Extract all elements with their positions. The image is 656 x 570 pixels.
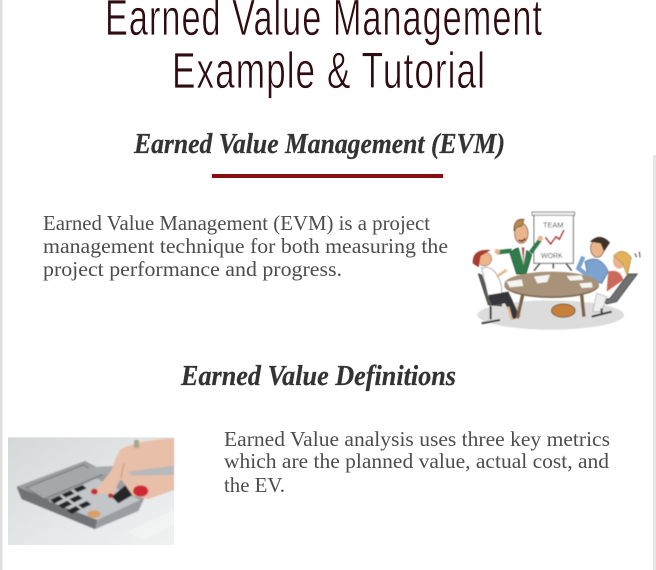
- text block: EVM description: project performance and progress.: [43, 257, 342, 281]
- icon: team meeting illustration: TEAM: [543, 220, 563, 229]
- text block: EVM description: Earned Value Management (EVM) is a project: [43, 211, 430, 235]
- text block: EVM description: [43, 211, 448, 281]
- icon: team meeting illustration: [473, 212, 640, 330]
- woman left: [478, 274, 502, 306]
- flip chart: [534, 263, 572, 271]
- heading: Earned Value Definitions: Earned Value Definitions: [180, 361, 456, 392]
- heading underline: [212, 174, 443, 178]
- cat: [551, 304, 575, 317]
- icon: calculator photo: [8, 437, 174, 545]
- presenter: [517, 272, 525, 274]
- text block: key metrics: [224, 427, 610, 497]
- man right: [585, 259, 608, 283]
- text block: key metrics: Earned Value analysis uses three key metrics: [224, 427, 610, 451]
- woman right: [602, 274, 637, 304]
- text block: EVM description: management technique for both measuring the: [43, 234, 448, 258]
- table: [517, 295, 584, 318]
- title: [105, 0, 543, 99]
- text block: key metrics: the EV.: [224, 473, 285, 497]
- text block: key metrics: which are the planned value, actual cost, and: [224, 449, 610, 473]
- heading: Earned Value Management (EVM): Earned Value Management (EVM): [133, 129, 505, 160]
- icon: team meeting illustration: WORK: [541, 253, 563, 260]
- title: Example & Tutorial: [172, 42, 486, 99]
